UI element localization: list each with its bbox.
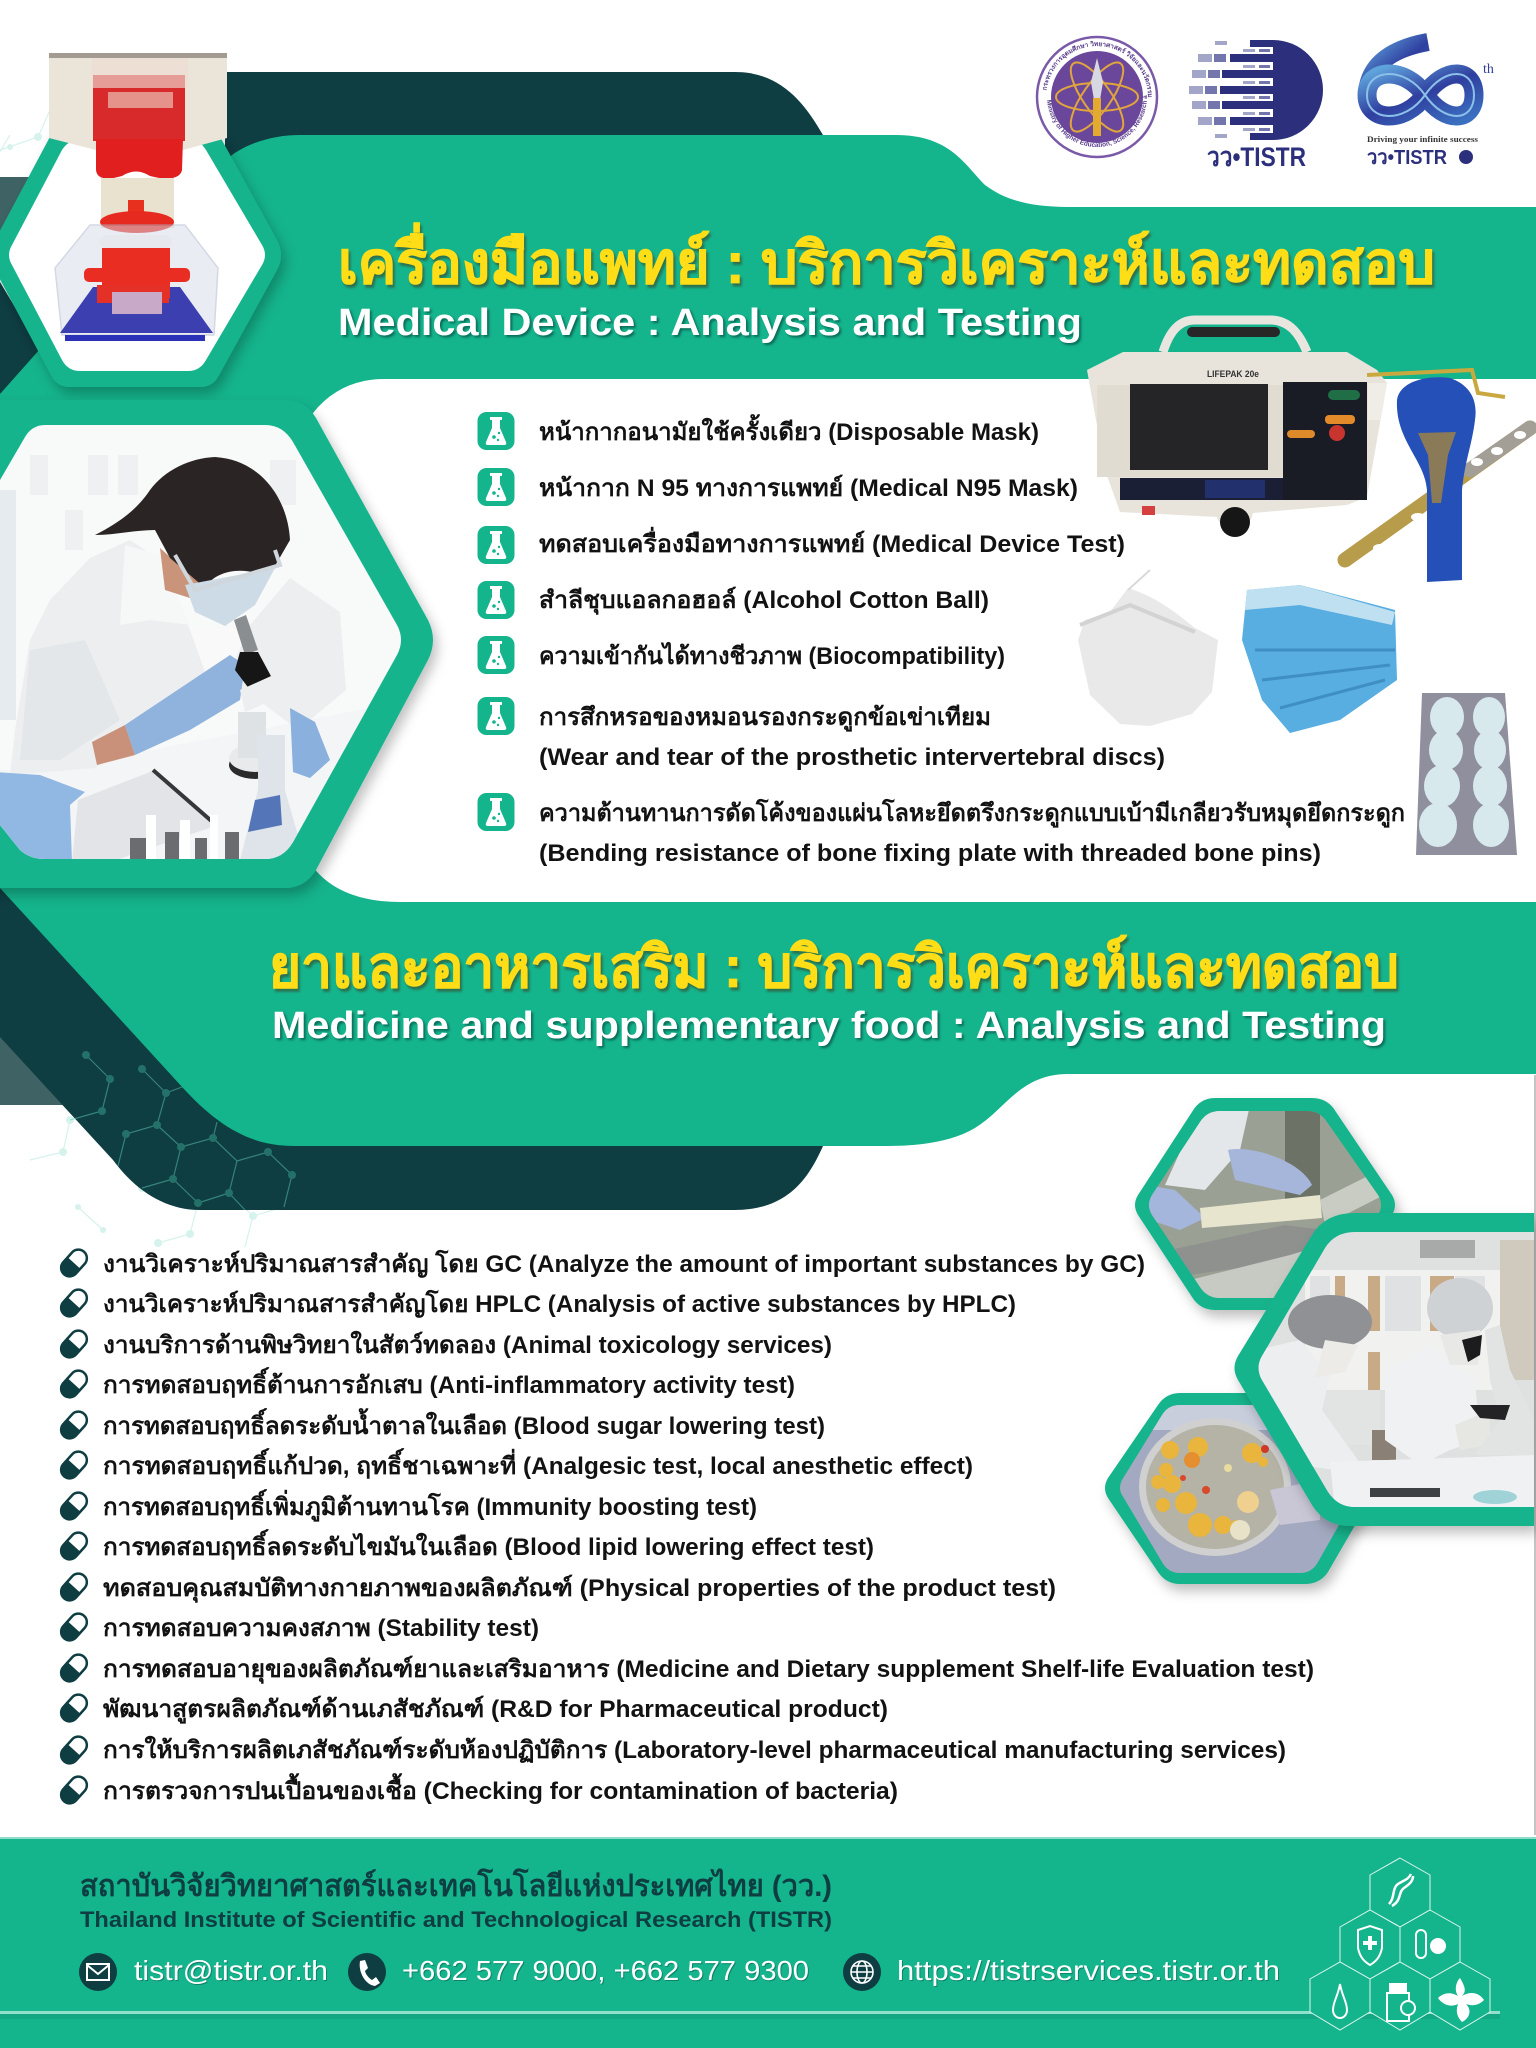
heading: medicine English: Medicine and supplementary food : Analysis and Testing [272, 1005, 1386, 1047]
table [0, 708, 368, 859]
list item [478, 636, 1005, 674]
list item: การทดสอบฤทธิ์แก้ปวด, ฤทธิ์ชาเฉพาะที่ (Analgesic test, local anesthetic effect) [103, 1448, 973, 1480]
shelves [1305, 1270, 1500, 1390]
contact: email [79, 1953, 328, 1991]
list item: การทดสอบฤทธิ์ต้านการอักเสบ (Anti-inflammatory activity test) [103, 1367, 795, 1399]
list item: พัฒนาสูตรผลิตภัณฑ์ด้านเภสัชภัณฑ์ (R&D for Pharmaceutical product) [103, 1695, 888, 1724]
logo: 60th anniversary: th [1483, 62, 1494, 77]
list item: การทดสอบฤทธิ์ลดระดับน้ำตาลในเลือด (Blood sugar lowering test) [103, 1407, 825, 1440]
defibrillator: LIFEPAK 20e [1207, 369, 1259, 379]
icon: bottle [1387, 1984, 1415, 2021]
contact: website [843, 1953, 1280, 1991]
list item: (Bending resistance of bone fixing plate with threaded bone pins) [539, 840, 1321, 867]
bone plate [1345, 428, 1530, 560]
group: device photos [1078, 320, 1530, 855]
heading: medicine Thai: ยาและอาหารเสริม : บริการวิเคราะห์และทดสอบ [269, 934, 1399, 1000]
list item: (Wear and tear of the prosthetic intervertebral discs) [539, 744, 1165, 771]
dark band top [225, 72, 823, 170]
hexagon icon cluster [1310, 1858, 1490, 2030]
list: medicine and supplement services [58, 1246, 1314, 1807]
hexagon: acrylic test fixture [0, 53, 281, 387]
lab coat [10, 540, 346, 775]
dark band lower [0, 888, 823, 1210]
icon: capsule and tablet [1416, 1930, 1446, 1958]
list item [478, 793, 1405, 867]
list item: การตรวจการปนเปื้อนของเชื้อ (Checking for contamination of bacteria) [103, 1772, 898, 1805]
blister pack [1416, 693, 1517, 855]
list item: สำลีชุบแอลกอฮอล์ (Alcohol Cotton Ball) [539, 586, 989, 616]
blue surgical mask [1242, 585, 1397, 733]
list item: งานบริการด้านพิษวิทยาในสัตว์ทดลอง (Animal toxicology services) [103, 1330, 832, 1359]
heading: medical device Thai: เครื่องมือแพทย์ : บริการวิเคราะห์และทดสอบ [338, 222, 1435, 296]
list item: การทดสอบฤทธิ์เพิ่มภูมิต้านทานโรค (Immunity boosting test) [103, 1489, 757, 1522]
hexagon photo: lab scientists [1234, 1213, 1534, 1526]
acrylic lower box [55, 225, 218, 341]
icon: shield [1358, 1926, 1382, 1965]
list item: งานวิเคราะห์ปริมาณสารสำคัญโดย HPLC (Analysis of active substances by HPLC) [103, 1289, 1016, 1318]
logo: 60th anniversary: Driving your infinite success [1367, 134, 1479, 144]
hair [95, 457, 290, 588]
logo: 60th anniversary: วว•TISTR [1367, 147, 1447, 169]
contact: email: tistr@tistr.or.th [134, 1955, 328, 1986]
list item: การทดสอบฤทธิ์ลดระดับไขมันในเลือด (Blood lipid lowering effect test) [103, 1529, 874, 1561]
list item: ความต้านทานการดัดโค้งของแผ่นโลหะยึดตรึงกระดูกแบบเบ้ามีเกลียวรับหมุดยึดกระดูก [539, 798, 1405, 829]
microscope [1485, 1325, 1515, 1390]
grey teal wedge upper [0, 177, 32, 232]
test tube rack [130, 832, 239, 860]
list item: หน้ากาก N 95 ทางการแพทย์ (Medical N95 Mask) [539, 474, 1078, 502]
list item: การทดสอบความคงสภาพ (Stability test) [103, 1615, 539, 1642]
glove [125, 655, 245, 755]
logo: ministry emblem [1036, 36, 1158, 158]
logos [1036, 33, 1494, 172]
hexagon photo: lab tray [1135, 1098, 1395, 1310]
acrylic upper box [49, 53, 227, 178]
main green ribbon [0, 135, 1536, 1146]
right edge line [1534, 1075, 1536, 1835]
list item [478, 526, 1125, 564]
acrylic shaft and cup [100, 178, 174, 248]
white N95 mask [1078, 570, 1218, 726]
flask [240, 735, 298, 859]
list item [478, 581, 989, 619]
defibrillator [1087, 320, 1387, 537]
list item: ความเข้ากันได้ทางชีวภาพ (Biocompatibility) [539, 641, 1005, 670]
left scientist [1258, 1340, 1358, 1470]
logo: TISTR [1189, 40, 1323, 172]
dark wedge left [0, 282, 40, 394]
microscope [229, 615, 271, 779]
list item: การสึกหรอของหมอนรองกระดูกข้อเข่าเทียม [539, 704, 991, 732]
mask [185, 568, 275, 626]
left hand glove [0, 772, 85, 862]
icon: flower [1438, 1978, 1484, 2022]
clipboard [72, 772, 210, 859]
logo: 60th anniversary [1367, 42, 1494, 169]
right scientist [1385, 1390, 1478, 1459]
contact: phone [348, 1953, 809, 1991]
list item [478, 697, 1165, 771]
contact: website: https://tistrservices.tistr.or.th [897, 1955, 1280, 1986]
footer organisation name Thai: สถาบันวิจัยวิทยาศาสตร์และเทคโนโลยีแห่งประเทศไทย (วว.) [80, 1867, 832, 1903]
list item: งานวิเคราะห์ปริมาณสารสำคัญ โดย GC (Analyze the amount of important substances by GC) [103, 1249, 1145, 1278]
contact: phone: +662 577 9000, +662 577 9300 [402, 1955, 809, 1986]
list item: หน้ากากอนามัยใช้ครั้งเดียว (Disposable Mask) [539, 413, 1039, 446]
list item [478, 412, 1039, 450]
skin [92, 725, 135, 765]
logo: TISTR: วว•TISTR [1207, 142, 1306, 172]
table [1330, 1455, 1534, 1510]
list item: ทดสอบเครื่องมือทางการแพทย์ (Medical Device Test) [539, 526, 1125, 558]
implant hook [1367, 370, 1505, 397]
grey teal wedge lower [0, 1030, 75, 1105]
background network pattern [0, 110, 290, 1247]
hexagon photo: petri dish [1105, 1393, 1374, 1584]
list item [478, 468, 1078, 506]
footer panel [0, 1837, 1536, 2048]
logo: ministry emblem: กระทรวงการอุดมศึกษา วิทยาศาสตร์ วิจัยและนวัตกรรม [1043, 40, 1152, 98]
white panel: medical device list [200, 379, 1536, 902]
network on dark band [70, 1051, 296, 1210]
small implant plate [1418, 432, 1456, 503]
list item: ทดสอบคุณสมบัติทางกายภาพของผลิตภัณฑ์ (Physical properties of the product test) [103, 1574, 1056, 1604]
icon: drop [1333, 1984, 1347, 2018]
list item: การให้บริการผลิตเภสัชภัณฑ์ระดับห้องปฏิบัติการ (Laboratory-level pharmaceutical manufacturing services) [103, 1735, 1286, 1764]
footer organisation name English: Thailand Institute of Scientific and Technological Research (TISTR) [80, 1907, 832, 1932]
hexagon: scientist photo [0, 400, 433, 888]
blue bone model [1397, 377, 1476, 582]
heading: medical device English: Medical Device : Analysis and Testing [338, 302, 1082, 344]
list item: การทดสอบอายุของผลิตภัณฑ์ยาและเสริมอาหาร (Medicine and Dietary supplement Shelf-life Evaluation test) [103, 1655, 1314, 1685]
list: medical device services [478, 412, 1405, 867]
icon: DNA [1389, 1874, 1413, 1906]
